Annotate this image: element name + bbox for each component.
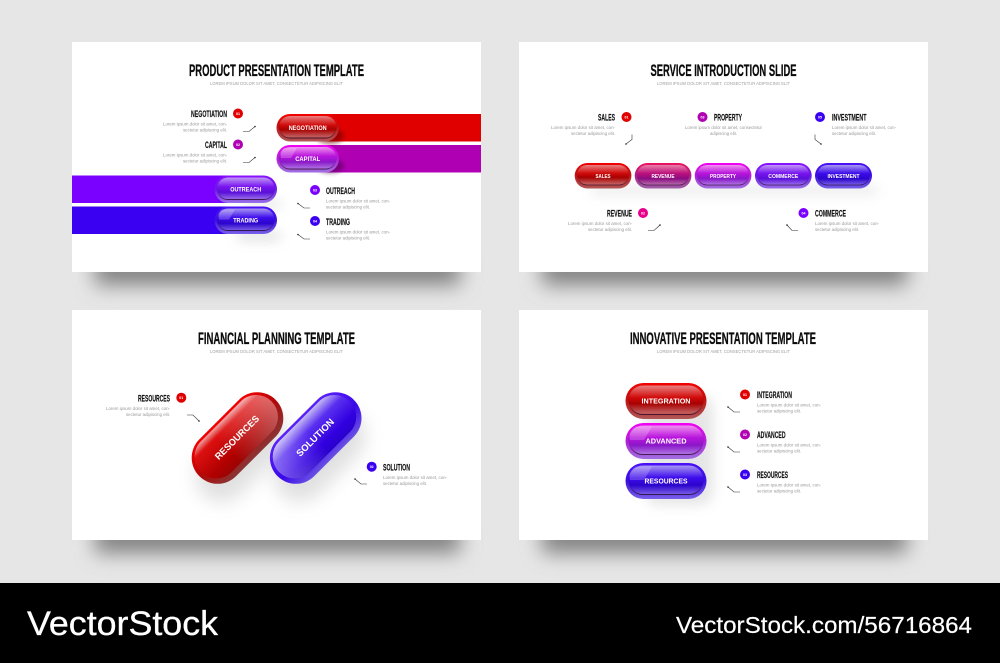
capsule shadow: solution [263,399,376,513]
item: resources: Lorem ipsum dolor sit amet, con- [757,482,822,488]
pill: negotiation: NEGOTIATION [289,126,327,132]
capsule: resources: RESOURCES [213,414,262,462]
pill: revenue [635,163,691,188]
item: advanced [727,429,822,454]
pill: property [695,163,751,188]
item: solution: sectetur adipiscing elit. [383,481,427,486]
bar: negotiation [300,114,481,142]
panel: financial planning [72,310,481,540]
pill: advanced: ADVANCED [646,436,687,446]
panel shadow: service [542,255,907,285]
item: property: 03 [700,116,704,120]
capsule: solution: SOLUTION [294,417,337,459]
pill: trading: TRADING [233,218,258,224]
item: sales [551,112,632,145]
item: negotiation: Lorem ipsum dolor sit amet, con- [163,122,228,126]
item: integration [727,389,822,414]
title: SERVICE INTRODUCTION SLIDE [650,62,797,80]
pill: resources [626,463,706,499]
item: integration: INTEGRATION [757,389,792,400]
panel shadow: product [95,255,460,285]
item: resources: 03 [743,473,747,477]
item: solution: 02 [370,465,374,469]
pill: resources: RESOURCES [644,476,688,486]
pill: outreach [214,176,277,203]
item: outreach: 03 [313,188,317,192]
item: commerce: sectetur adipiscing elit. [815,227,859,232]
item: trading: Lorem ipsum dolor sit amet, con- [326,230,391,234]
pill: property: PROPERTY [710,174,736,180]
subtitle: LOREM IPSUM DOLOR SIT AMET, CONSECTETUR ADIPISCING ELIT [210,81,343,86]
item: negotiation: NEGOTIATION [191,108,227,119]
item: investment: 05 [818,116,822,120]
item: trading: TRADING [326,216,350,227]
item: commerce: 04 [802,212,806,216]
item: resources: 01 [179,396,183,400]
item: sales: 01 [624,116,628,120]
subtitle: LOREM IPSUM DOLOR SIT AMET, CONSECTETUR ADIPISCING ELIT [657,349,790,354]
soft shadow under stack [645,395,713,505]
item: commerce: Lorem ipsum dolor sit amet, con- [815,221,880,226]
item: capital: CAPITAL [205,139,227,150]
item: investment: INVESTMENT [832,112,867,122]
panel: product presentation [72,42,481,272]
bar: trading [72,206,252,234]
capsule: resources [181,381,294,495]
item: outreach: OUTREACH [326,185,355,196]
item: resources: sectetur adipiscing elit. [757,488,801,494]
panel shadow: financial [95,523,460,553]
item: capital: Lorem ipsum dolor sit amet, con- [163,152,228,158]
item: advanced: 02 [743,433,747,437]
item: negotiation [163,108,256,132]
item: property: adipiscing elit. [710,131,737,136]
item: advanced: sectetur adipiscing elit. [757,448,801,454]
item: outreach: Lorem ipsum dolor sit amet, con- [326,198,391,204]
item: resources [106,392,200,422]
item: capital [163,139,256,164]
subtitle: LOREM IPSUM DOLOR SIT AMET, CONSECTETUR ADIPISCING ELIT [657,81,790,86]
soft shadow: trading [238,232,280,240]
soft shadow: outreach [245,200,281,208]
footer logo: VectorStock [27,605,219,643]
item: commerce: COMMERCE [815,208,846,218]
item: trading: sectetur adipiscing elit. [326,236,370,240]
pill: investment [815,163,872,188]
item: sales: sectetur adipiscing elit. [571,131,615,136]
title: INNOVATIVE PRESENTATION TEMPLATE [630,330,816,348]
item: resources: sectetur adipiscing elit. [126,412,170,417]
item: resources: RESOURCES [757,469,788,480]
item: integration: Lorem ipsum dolor sit amet, con- [757,402,822,408]
capsule shadow: resources [185,399,298,513]
item: advanced: Lorem ipsum dolor sit amet, con- [757,442,822,448]
item: trading [297,216,391,240]
pill shadow on capital bar [316,159,344,173]
pill: advanced [626,423,706,459]
subtitle: LOREM IPSUM DOLOR SIT AMET, CONSECTETUR ADIPISCING ELIT [210,349,343,354]
item: negotiation: sectetur adipiscing elit. [183,128,227,132]
item: property: PROPERTY [714,112,742,122]
pill: revenue: REVENUE [652,174,675,180]
item: revenue: sectetur adipiscing elit. [588,227,632,232]
bar: outreach [72,176,252,203]
item: advanced: ADVANCED [757,429,786,440]
item: property [685,112,763,136]
soft shadow under pills [592,187,877,194]
item: capital: sectetur adipiscing elit. [183,158,227,164]
footer bar [0,583,1000,663]
item: commerce [786,208,880,232]
pill: negotiation [276,114,339,142]
item: solution [354,462,448,486]
item: resources: Lorem ipsum dolor sit amet, con- [106,406,171,411]
pill: outreach: OUTREACH [230,187,261,193]
item: negotiation: 01 [236,112,240,116]
pill: commerce [755,163,812,188]
pill: integration: INTEGRATION [642,396,690,406]
item: solution: Lorem ipsum dolor sit amet, con- [383,475,448,480]
item: trading: 04 [313,220,317,224]
pill: sales: SALES [596,174,611,180]
item: property: Lorem ipsum dolor sit amet, consectetur [685,125,763,130]
item: investment: sectetur adipiscing elit. [832,131,876,136]
item: revenue: Lorem ipsum dolor sit amet, con- [568,221,633,226]
pill: trading [214,206,277,234]
item: solution: SOLUTION [383,462,410,472]
item: integration: 01 [743,393,747,397]
item: resources: RESOURCES [138,392,170,404]
footer image id: VectorStock.com/56716864 [676,612,972,638]
item: sales: SALES [598,112,615,122]
item: resources [727,469,822,494]
panel shadow: innovative [542,523,907,553]
pill shadow on negotiation bar [316,128,344,144]
item: revenue: 02 [641,212,645,216]
item: outreach [297,185,391,210]
item: sales: Lorem ipsum dolor sit amet, con- [551,125,616,130]
item: capital: 02 [236,143,240,147]
item: investment [815,112,897,145]
panel: service introduction [519,42,928,272]
title: FINANCIAL PLANNING TEMPLATE [198,330,355,348]
pill: sales [575,163,631,188]
panel: innovative presentation [519,310,928,540]
capsule: solution [259,381,372,495]
item: revenue: REVENUE [607,208,632,218]
pill: investment: INVESTMENT [828,174,860,180]
pill: capital [276,145,339,172]
title: PRODUCT PRESENTATION TEMPLATE [189,62,364,80]
item: integration: sectetur adipiscing elit. [757,408,801,414]
item: outreach: sectetur adipiscing elit. [326,204,370,210]
pill: commerce: COMMERCE [768,174,799,180]
item: revenue [568,208,661,232]
pill: capital: CAPITAL [295,157,321,163]
pill: integration [626,383,706,419]
item: investment: Lorem ipsum dolor sit amet, con- [832,125,897,130]
bar: capital [300,145,481,172]
